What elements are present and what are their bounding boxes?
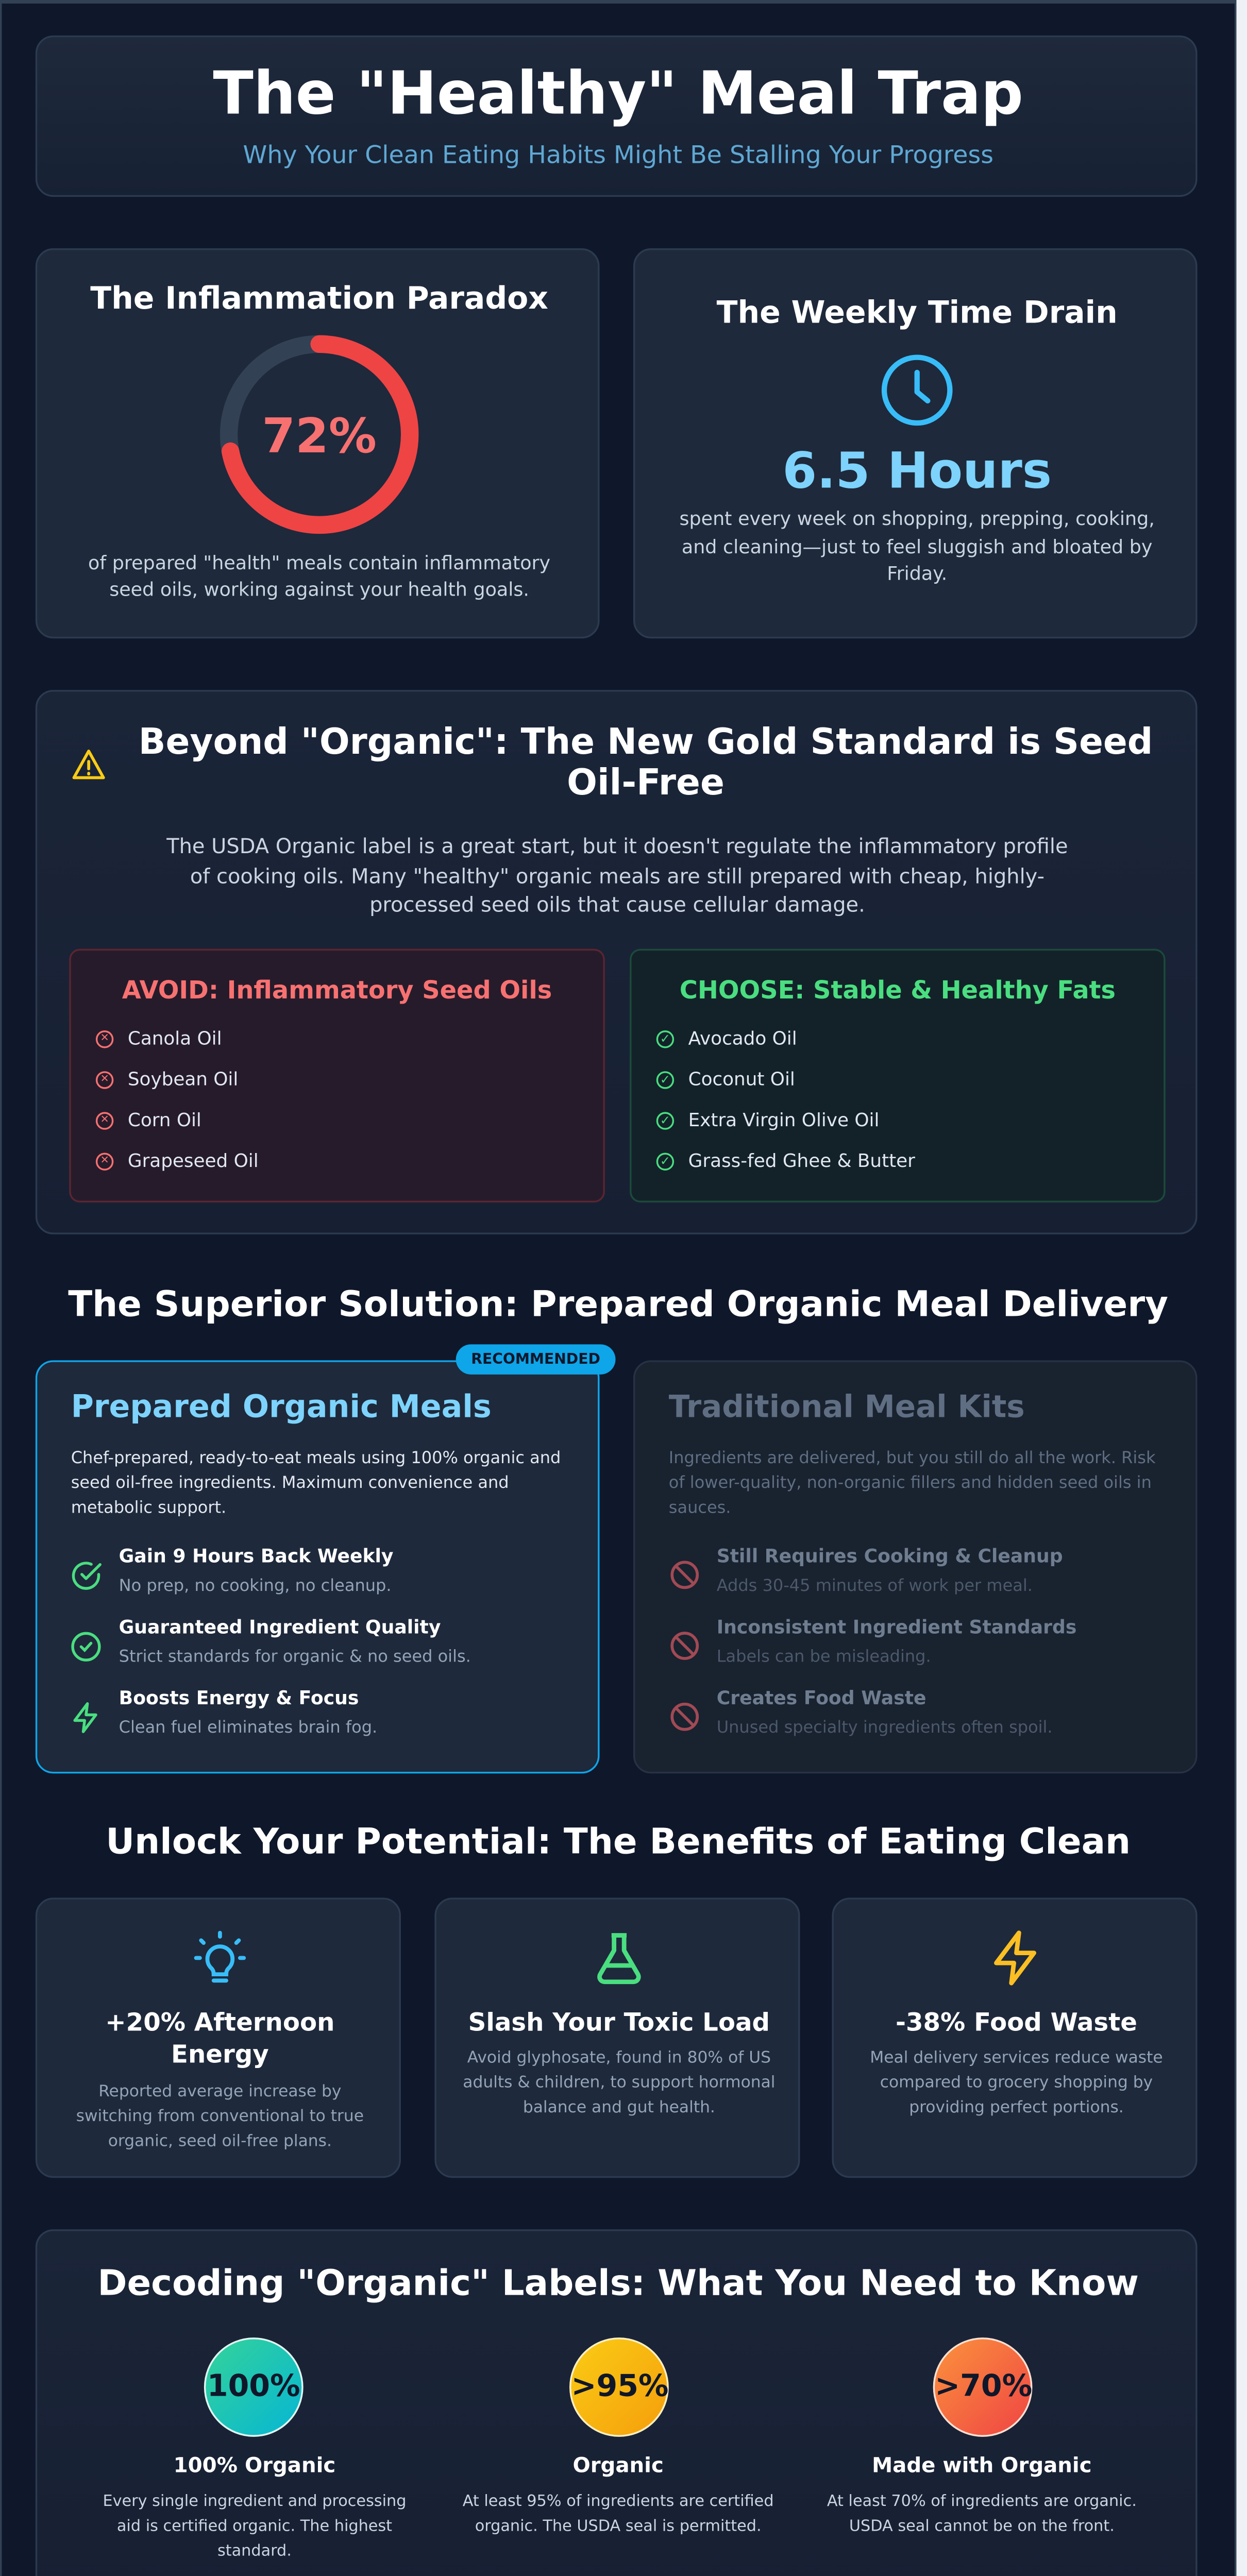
- intro text: The USDA Organic label is a great start, but it doesn't regulate the inflammatory profile of cooking oils. Many "healthy" organic meals are still prepared with cheap, highly-processed seed oils that cause cellular damage.: [166, 834, 1068, 917]
- header: [36, 36, 1198, 197]
- description: Ingredients are delivered, but you still do all the work. Risk of lower-quality, non-organic fillers and hidden seed oils in sauces.: [669, 1449, 1156, 1518]
- avoid items: Corn Oil: [128, 1110, 201, 1131]
- icon: lightning: [994, 1930, 1036, 1986]
- choose items: Grass-fed Ghee & Butter: [688, 1151, 915, 1172]
- title: Slash Your Toxic Load: [468, 2009, 770, 2038]
- icon: warning: [72, 750, 105, 779]
- label: organic 95: [463, 2337, 774, 2536]
- choose items: ✓: [660, 1032, 670, 1046]
- donut chart: [220, 335, 418, 534]
- label: 100% organic: 100% Organic: [174, 2453, 335, 2478]
- panel: avoid list: [69, 949, 605, 1202]
- choose items: [656, 1029, 915, 1172]
- icon: clock: [881, 354, 953, 426]
- choose items: Extra Virgin Olive Oil: [688, 1110, 879, 1131]
- heading: The Weekly Time Drain: [717, 296, 1118, 332]
- heading: Prepared Organic Meals: [71, 1391, 492, 1426]
- panel: choose list: [630, 949, 1166, 1202]
- drawback: standards: [670, 1617, 1076, 1667]
- benefit: gain 9 hours: [72, 1547, 394, 1596]
- benefit: ingredient quality: Guaranteed Ingredient Quality: [119, 1617, 441, 1639]
- label: organic 95: >95%: [571, 2369, 669, 2405]
- label: made with organic: [827, 2337, 1137, 2536]
- drawback: waste: [670, 1688, 1053, 1738]
- description: spent every week on shopping, prepping, cooking, and cleaning—just to feel sluggish and bloated by Friday.: [679, 509, 1155, 585]
- choose items: Coconut Oil: [688, 1070, 795, 1091]
- right scroll strip: [1236, 0, 1247, 2576]
- icon: flask: [597, 1933, 641, 1985]
- description: of prepared "health" meals contain inflammatory seed oils, working against your health goals.: [88, 553, 550, 601]
- benefit: energy: Boosts Energy & Focus: [119, 1688, 359, 1709]
- avoid items: [96, 1029, 259, 1172]
- badge: recommended: RECOMMENDED: [471, 1350, 600, 1367]
- drawback: waste: Creates Food Waste: [717, 1688, 926, 1709]
- panel: weekly time drain: [633, 248, 1198, 638]
- avoid items: ✕: [100, 1114, 109, 1126]
- label: organic 95: Organic: [573, 2453, 664, 2478]
- badge: recommended: [456, 1344, 616, 1375]
- avoid items: ✕: [100, 1032, 109, 1045]
- subtitle: Why Your Clean Eating Habits Might Be Stalling Your Progress: [243, 142, 993, 170]
- benefit: gain 9 hours: Gain 9 Hours Back Weekly: [119, 1547, 394, 1568]
- drawback: cooking: Adds 30-45 minutes of work per meal.: [717, 1577, 1033, 1596]
- drawback: waste: Unused specialty ingredients often spoil.: [717, 1719, 1053, 1738]
- avoid heading: AVOID: Inflammatory Seed Oils: [122, 977, 552, 1006]
- benefit: energy: Clean fuel eliminates brain fog.: [119, 1719, 377, 1738]
- benefit: ingredient quality: Strict standards for organic & no seed oils.: [119, 1648, 471, 1667]
- heading: The Inflammation Paradox: [90, 282, 548, 317]
- label: made with organic: >70%: [935, 2369, 1032, 2405]
- description: Chef-prepared, ready-to-eat meals using 100% organic and seed oil-free ingredients. Maximum convenience and metabolic support.: [71, 1449, 561, 1518]
- heading: Traditional Meal Kits: [669, 1391, 1025, 1426]
- label: organic 95: At least 95% of ingredients are certified organic. The USDA seal is permitted.: [463, 2494, 774, 2536]
- choose items: Avocado Oil: [688, 1029, 797, 1050]
- label: 100% organic: [103, 2337, 406, 2561]
- label: made with organic: At least 70% of ingredients are organic. USDA seal cannot be on the front.: [827, 2494, 1137, 2536]
- drawback: cooking: Still Requires Cooking & Cleanup: [717, 1547, 1063, 1568]
- choose items: ✓: [660, 1155, 670, 1169]
- panel: afternoon energy: [36, 1897, 401, 2178]
- drawback: standards: Inconsistent Ingredient Standards: [717, 1617, 1076, 1639]
- desc: Meal delivery services reduce waste compared to grocery shopping by providing perfect portions.: [870, 2050, 1163, 2117]
- benefit: energy: [73, 1688, 377, 1738]
- heading: Beyond "Organic": The New Gold Standard is Seed Oil-Free: [139, 720, 1153, 803]
- avoid items: ✕: [100, 1155, 109, 1167]
- panel: inflammation paradox: [36, 248, 600, 638]
- choose items: ✓: [660, 1114, 670, 1128]
- title: +20% Afternoon Energy: [105, 2009, 334, 2070]
- drawback: cooking: [670, 1547, 1063, 1596]
- avoid items: Grapeseed Oil: [128, 1151, 259, 1172]
- desc: Avoid glyphosate, found in 80% of US adults & children, to support hormonal balance and gut health.: [463, 2050, 775, 2117]
- section heading: benefits: Unlock Your Potential: The Benefits of Eating Clean: [106, 1820, 1131, 1862]
- panel: food waste: [832, 1897, 1198, 2178]
- title: The "Healthy" Meal Trap: [213, 59, 1023, 128]
- panel: decoding labels: [36, 2229, 1198, 2576]
- stat: 6.5 Hours: [782, 442, 1052, 500]
- avoid items: Canola Oil: [128, 1029, 222, 1050]
- avoid items: Soybean Oil: [128, 1070, 238, 1091]
- drawback: standards: Labels can be misleading.: [717, 1648, 931, 1667]
- panel: toxic load: [434, 1897, 800, 2178]
- donut chart: 72%: [262, 408, 377, 464]
- panel: prepared organic meals: [36, 1360, 600, 1773]
- heading: Decoding "Organic" Labels: What You Need to Know: [97, 2261, 1139, 2304]
- panel: traditional meal kits: [633, 1360, 1198, 1773]
- label: made with organic: Made with Organic: [872, 2453, 1092, 2478]
- avoid items: ✕: [100, 1073, 109, 1086]
- benefit: ingredient quality: [71, 1617, 471, 1667]
- section heading: superior solution: The Superior Solution: Prepared Organic Meal Delivery: [68, 1282, 1168, 1325]
- label: 100% organic: Every single ingredient and processing aid is certified organic. The highest standard.: [103, 2494, 406, 2561]
- label: 100% organic: 100%: [207, 2369, 300, 2405]
- choose heading: CHOOSE: Stable & Healthy Fats: [680, 977, 1116, 1006]
- title: -38% Food Waste: [896, 2009, 1137, 2038]
- benefit: gain 9 hours: No prep, no cooking, no cleanup.: [119, 1577, 392, 1596]
- panel: beyond organic: [36, 690, 1198, 1234]
- desc: Reported average increase by switching from conventional to true organic, seed oil-free plans.: [76, 2084, 364, 2151]
- icon: lightbulb: [194, 1931, 246, 1982]
- choose items: ✓: [660, 1073, 670, 1087]
